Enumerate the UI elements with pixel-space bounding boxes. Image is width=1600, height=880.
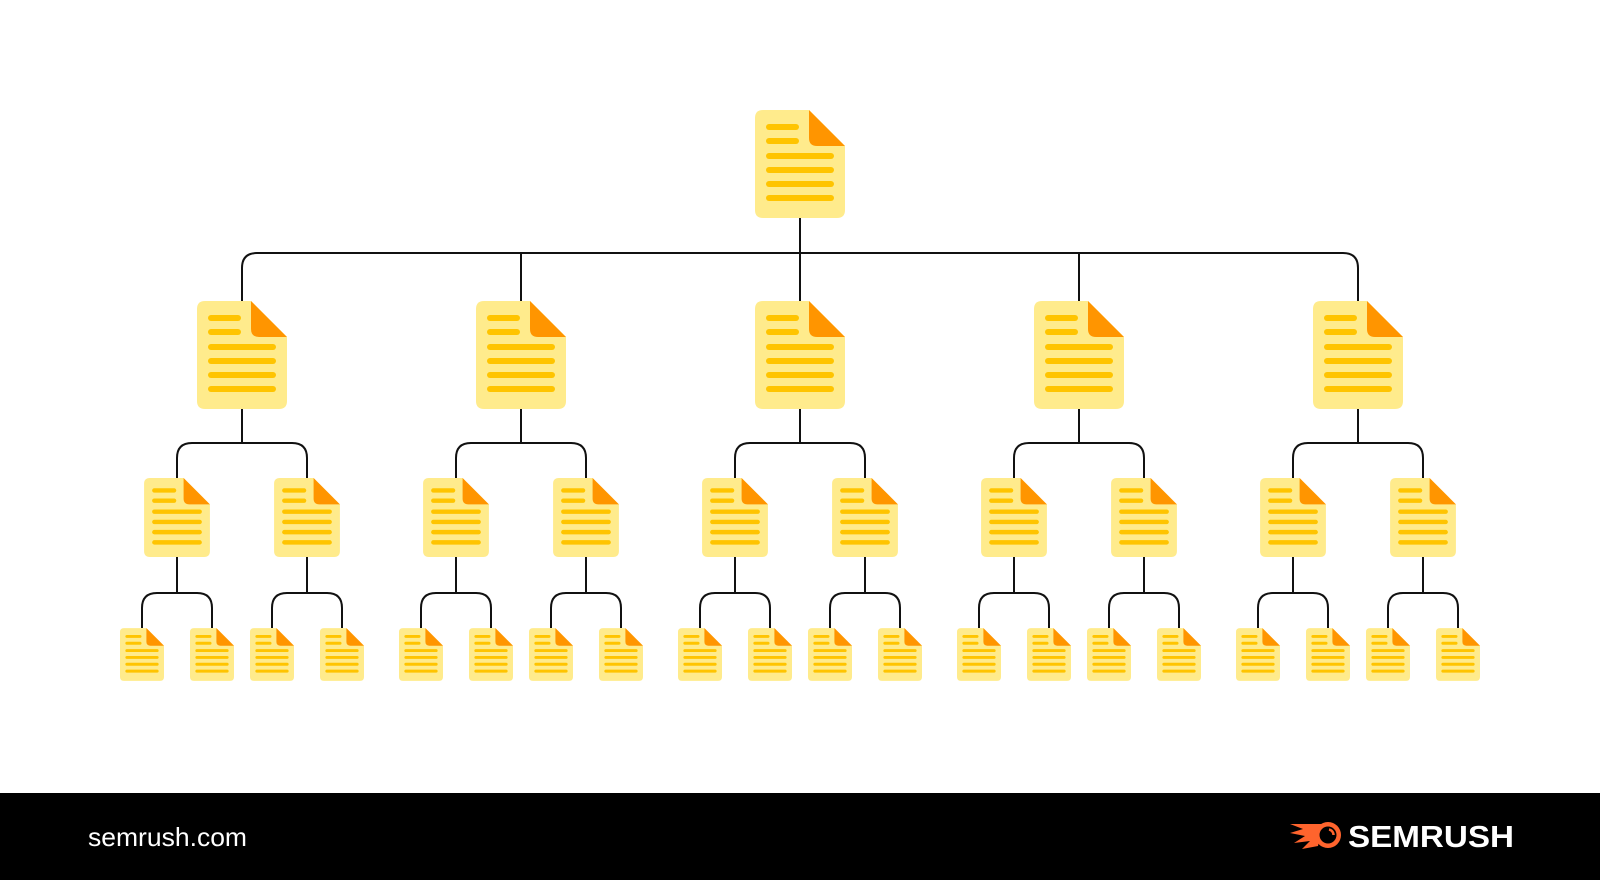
connector lines [142,218,1458,628]
icon: semrush logo flame [1290,822,1341,849]
icon: root document [755,110,845,218]
level 2 documents [144,478,1456,557]
level 3 documents [120,628,1480,681]
footer url text: semrush.com [88,822,247,852]
logo wordmark: SEMRUSH [1348,819,1514,854]
footer bar [0,793,1600,880]
level 1 documents [197,301,1403,409]
